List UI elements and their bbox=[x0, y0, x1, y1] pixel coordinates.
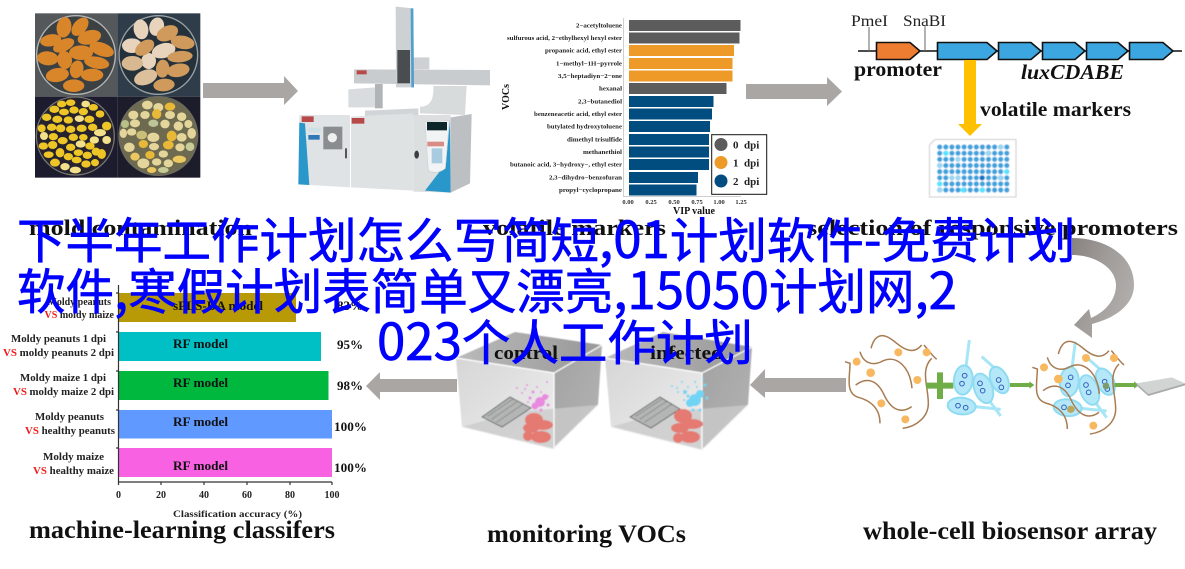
axis tick labels: 0.00 bbox=[622, 199, 634, 206]
accuracy values: 98% bbox=[337, 378, 363, 393]
compound names: hexanal bbox=[599, 86, 622, 92]
panel: GC-MS instrument bbox=[298, 7, 490, 193]
model labels: RF model bbox=[173, 458, 228, 473]
dish: moldy maize bbox=[119, 97, 198, 175]
dish: healthy peanuts bbox=[36, 14, 116, 94]
accuracy values: 95% bbox=[337, 337, 363, 352]
axis title: VOCs: VOCs bbox=[501, 84, 512, 110]
compound names: dimethyl trisulfide bbox=[567, 136, 622, 144]
arrow: curved, promoters to biosensor bbox=[1072, 238, 1134, 338]
x-axis ticks: 0 bbox=[116, 490, 121, 501]
arrow: chart to promoter selection bbox=[746, 77, 842, 106]
legend: 0 dpi bbox=[733, 140, 759, 152]
group labels: Moldy peanuts 1 dpi bbox=[11, 334, 106, 345]
dish: healthy maize bbox=[36, 97, 114, 175]
compound names: butylated hydroxytoluene bbox=[547, 124, 622, 130]
axis tick labels: 0.75 bbox=[691, 199, 703, 206]
axis tick labels: 0.25 bbox=[645, 199, 657, 206]
axis tick labels bbox=[622, 199, 747, 206]
bars bbox=[629, 20, 740, 196]
compound names: 2−acetyltoluene bbox=[576, 22, 622, 30]
bars bbox=[119, 293, 332, 477]
arrow: combine bbox=[1010, 381, 1034, 389]
heading: selection of responsive promoters: selection of responsive promoters bbox=[807, 215, 1178, 240]
group labels: Moldy peanuts bbox=[35, 412, 104, 423]
heading: monitoring VOCs: monitoring VOCs bbox=[487, 521, 686, 548]
icon: well plate with luminescent wells bbox=[930, 140, 1016, 197]
group labels: VS healthy maize bbox=[33, 466, 115, 477]
panel: petri dish photo of moldy peanuts and maize bbox=[35, 13, 200, 178]
compound names: propyl−cyclopropane bbox=[559, 187, 622, 194]
x-axis ticks bbox=[116, 490, 340, 501]
arrow: down to plate bbox=[958, 60, 982, 136]
group labels: Moldy maize bbox=[43, 452, 105, 463]
accuracy values bbox=[334, 298, 367, 475]
label: infected: infected bbox=[650, 343, 723, 364]
heading: whole-cell biosensor array: whole-cell biosensor array bbox=[863, 518, 1158, 545]
arrow: chambers to classifiers bbox=[366, 372, 457, 400]
compound names: 1−methyl−1H−pyrrole bbox=[556, 60, 622, 68]
compound names: sulfurous acid, 2−ethylhexyl hexyl ester bbox=[507, 35, 622, 42]
label: luxCDABE: luxCDABE bbox=[1021, 60, 1124, 84]
compound names bbox=[507, 22, 622, 194]
restriction sites bbox=[869, 25, 925, 51]
panel: infected chamber bbox=[605, 332, 752, 450]
panel: promoter construct bbox=[851, 13, 1182, 136]
array plate bbox=[1137, 377, 1185, 396]
group labels: VS moldy maize bbox=[45, 310, 115, 321]
compound names: 2,3−dihydro−benzofuran bbox=[549, 174, 622, 182]
compound names: propanoic acid, ethyl ester bbox=[545, 48, 622, 54]
model labels bbox=[173, 298, 263, 473]
accuracy values: 100% bbox=[334, 460, 367, 475]
x-axis ticks: 60 bbox=[242, 490, 252, 501]
axis tick labels: 0.50 bbox=[668, 199, 680, 206]
x-axis title: Classification accuracy (%) bbox=[173, 509, 302, 520]
dish: moldy peanuts bbox=[119, 16, 198, 94]
label: PmeI: PmeI bbox=[851, 13, 888, 30]
compound names: butanoic acid, 3−hydroxy−, ethyl ester bbox=[510, 162, 622, 168]
model labels: RF model bbox=[173, 414, 228, 429]
backbone line bbox=[858, 50, 1182, 52]
panel: control chamber bbox=[456, 332, 602, 449]
label: promoter: promoter bbox=[854, 57, 942, 81]
x-axis ticks: 100 bbox=[324, 490, 340, 501]
heading: mold contamination: mold contamination bbox=[29, 215, 253, 240]
compound names: 3,5−heptadiyn−2−one bbox=[558, 73, 622, 80]
axis tick labels: 1.00 bbox=[713, 199, 725, 206]
title: blue overlay text: 023个人工作计划 bbox=[377, 301, 753, 375]
luxCDABE gene arrows bbox=[938, 42, 1173, 60]
accuracy values: 83% bbox=[337, 298, 363, 313]
legend bbox=[712, 135, 767, 194]
x-axis ticks: 40 bbox=[199, 490, 209, 501]
arrow: to array bbox=[1114, 381, 1139, 389]
plus sign bbox=[926, 372, 953, 399]
accuracy values: 100% bbox=[334, 419, 367, 434]
legend: 1 dpi bbox=[733, 158, 759, 170]
legend: 2 dpi bbox=[733, 176, 759, 188]
axis title: VIP value: VIP value bbox=[673, 206, 716, 217]
x-axis ticks: 20 bbox=[156, 490, 166, 501]
combined network and bacteria bbox=[1032, 341, 1124, 434]
axis lines bbox=[624, 18, 741, 196]
arrow: biosensor to chambers bbox=[750, 369, 846, 398]
axes bbox=[116, 285, 332, 485]
group labels: VS healthy peanuts bbox=[25, 426, 115, 437]
label: control: control bbox=[494, 343, 558, 364]
title: blue overlay text: 下半年工作计划怎么写简短,01计划软件-免费计划 bbox=[17, 199, 1076, 273]
label: volatile markers: volatile markers bbox=[980, 100, 1131, 121]
group labels: Moldy peanuts bbox=[47, 297, 111, 308]
chart: VIP values of VOCs bbox=[501, 18, 767, 217]
group labels: Moldy maize 1 dpi bbox=[20, 373, 106, 384]
group labels bbox=[3, 297, 115, 477]
label: SnaBI: SnaBI bbox=[903, 13, 946, 30]
promoter gene arrow bbox=[876, 42, 920, 60]
panel: whole-cell biosensor assembly bbox=[845, 336, 1185, 434]
bacteria bbox=[947, 340, 1013, 416]
axis tick labels: 1.25 bbox=[735, 199, 747, 206]
model labels: RF model bbox=[173, 375, 228, 390]
compound names: methanethiol bbox=[583, 149, 622, 156]
model labels: RF model bbox=[173, 336, 228, 351]
heading: volatile markers: volatile markers bbox=[483, 215, 666, 240]
arrow: photo to GC-MS instrument bbox=[203, 76, 298, 105]
model labels: sPLS-DA model bbox=[173, 298, 263, 313]
group labels: VS moldy peanuts 2 dpi bbox=[3, 348, 114, 359]
chart: classification accuracy bars bbox=[3, 285, 367, 520]
title: blue overlay text: 软件,寒假计划表简单又漂亮,15050计划网,2 bbox=[17, 250, 957, 324]
polymer network bbox=[845, 336, 937, 428]
x-axis ticks: 80 bbox=[285, 490, 295, 501]
heading: machine-learning classifers: machine-learning classifers bbox=[29, 517, 335, 544]
group labels: VS moldy maize 2 dpi bbox=[13, 387, 114, 398]
compound names: benzeneacetic acid, ethyl ester bbox=[534, 111, 622, 118]
compound names: 2,3−butanediol bbox=[578, 98, 622, 106]
